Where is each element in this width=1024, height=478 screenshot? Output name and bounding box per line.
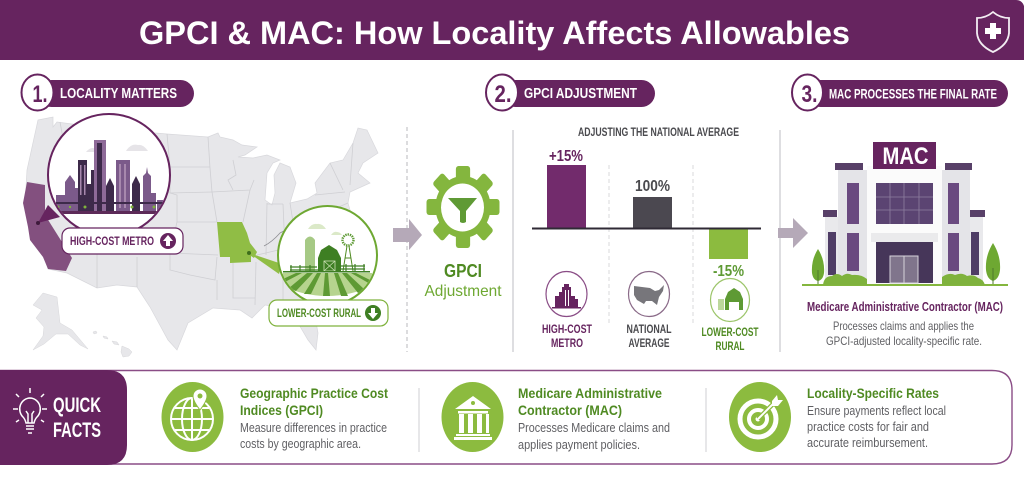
section 3 badge: MAC processes the final rate [792, 74, 1008, 110]
title: GPCI & MAC: How Locality Affects Allowables [139, 15, 850, 51]
state borders [60, 122, 353, 305]
fact: MAC: Contractor (MAC) [518, 402, 622, 418]
labels: bar categories: NATIONAL [626, 324, 672, 336]
bar chart: adjusting the national average [532, 127, 761, 325]
icon: institution building [442, 382, 504, 452]
arrow: GPCI to MAC [778, 218, 808, 248]
fact: locality-specific rates: practice costs for fair and [807, 420, 929, 434]
labels: bar categories: RURAL [716, 341, 744, 353]
fact: MAC [518, 385, 670, 452]
icon: globe with pin [162, 382, 224, 452]
fact: locality-specific rates: accurate reimbursement. [807, 436, 928, 450]
river line [264, 222, 297, 246]
quick facts tab: QUICK [53, 394, 101, 417]
fact: GPCI: Indices (GPCI) [240, 402, 323, 418]
arrow: locality to GPCI [393, 219, 422, 250]
section 2 badge: GPCI adjustment: 2. [494, 81, 512, 108]
labels: bar categories: AVERAGE [628, 338, 670, 350]
label: high-cost metro [62, 228, 183, 254]
section 3 badge: MAC processes the final rate: 3. [802, 81, 818, 108]
section 2 badge: GPCI adjustment: GPCI ADJUSTMENT [524, 86, 637, 102]
alaska [33, 293, 88, 350]
labels: bar categories: LOWER-COST [702, 327, 758, 339]
fact: MAC: Processes Medicare claims and [518, 421, 670, 435]
quick facts tab [0, 370, 127, 465]
fact: MAC: Medicare Administrative [518, 385, 662, 401]
header banner [0, 0, 1024, 60]
MAC sign: MAC [882, 143, 928, 170]
fact: MAC: applies payment policies. [518, 438, 640, 452]
bar: high-cost +15% [547, 148, 586, 228]
callout: lower-cost rural [247, 206, 388, 326]
label: GPCI adjustment [424, 261, 502, 300]
fact: GPCI: costs by geographic area. [240, 437, 361, 451]
section 1 badge: locality matters: LOCALITY MATTERS [60, 86, 177, 102]
illustration: MAC building [802, 142, 1008, 286]
text: MAC description: Processes claims and applies the [833, 319, 974, 333]
section 1 badge: locality matters: 1. [32, 81, 48, 108]
bar: rural -15%: -15% [713, 263, 744, 280]
icon: national map [628, 272, 670, 316]
section 1 badge: locality matters [22, 74, 194, 110]
fact: locality-specific rates [807, 385, 946, 450]
farm illustration [283, 224, 372, 296]
icon: lightbulb [13, 388, 47, 433]
labels: bar categories: METRO [551, 338, 583, 350]
fact: locality-specific rates: Ensure payments reflect local [807, 404, 946, 418]
chart heading: ADJUSTING THE NATIONAL AVERAGE [578, 127, 739, 139]
label: high-cost metro: HIGH-COST METRO [70, 236, 154, 248]
labels: bar categories: HIGH-COST [542, 324, 592, 336]
text: MAC description [807, 300, 1003, 348]
section 2 badge: GPCI adjustment [486, 74, 655, 110]
skyline illustration [55, 140, 165, 214]
label: lower-cost rural [269, 300, 388, 326]
icon: shield with medical cross [977, 12, 1009, 52]
label: lower-cost rural: LOWER-COST RURAL [277, 308, 361, 320]
fact: GPCI: Geographic Practice Cost [240, 385, 388, 401]
bar: national 100% [633, 178, 672, 228]
label: GPCI adjustment: Adjustment [424, 283, 502, 300]
highlighted state: Missouri [217, 222, 257, 263]
icon: gear with funnel [427, 166, 499, 248]
bar: high-cost +15%: +15% [549, 148, 583, 165]
label: GPCI adjustment: GPCI [444, 261, 482, 281]
icon: target with arrow [729, 382, 791, 452]
bar: rural -15% [709, 229, 748, 280]
icon: metro [546, 272, 587, 316]
hawaii [93, 331, 132, 357]
fact: GPCI: Measure differences in practice [240, 421, 387, 435]
quick facts tab: FACTS [53, 419, 101, 442]
labels: bar categories [542, 324, 758, 353]
panel: quick facts [0, 370, 1012, 465]
fact: locality-specific rates: Locality-Specific Rates [807, 385, 939, 401]
icon: rural barn [710, 278, 750, 322]
text: MAC description: GPCI-adjusted locality-specific rate. [826, 334, 982, 348]
fact: GPCI [240, 385, 388, 451]
callout: high-cost metro [36, 114, 183, 254]
highlighted state: California [23, 182, 72, 271]
US map [25, 117, 378, 357]
bar: national 100%: 100% [635, 178, 670, 195]
